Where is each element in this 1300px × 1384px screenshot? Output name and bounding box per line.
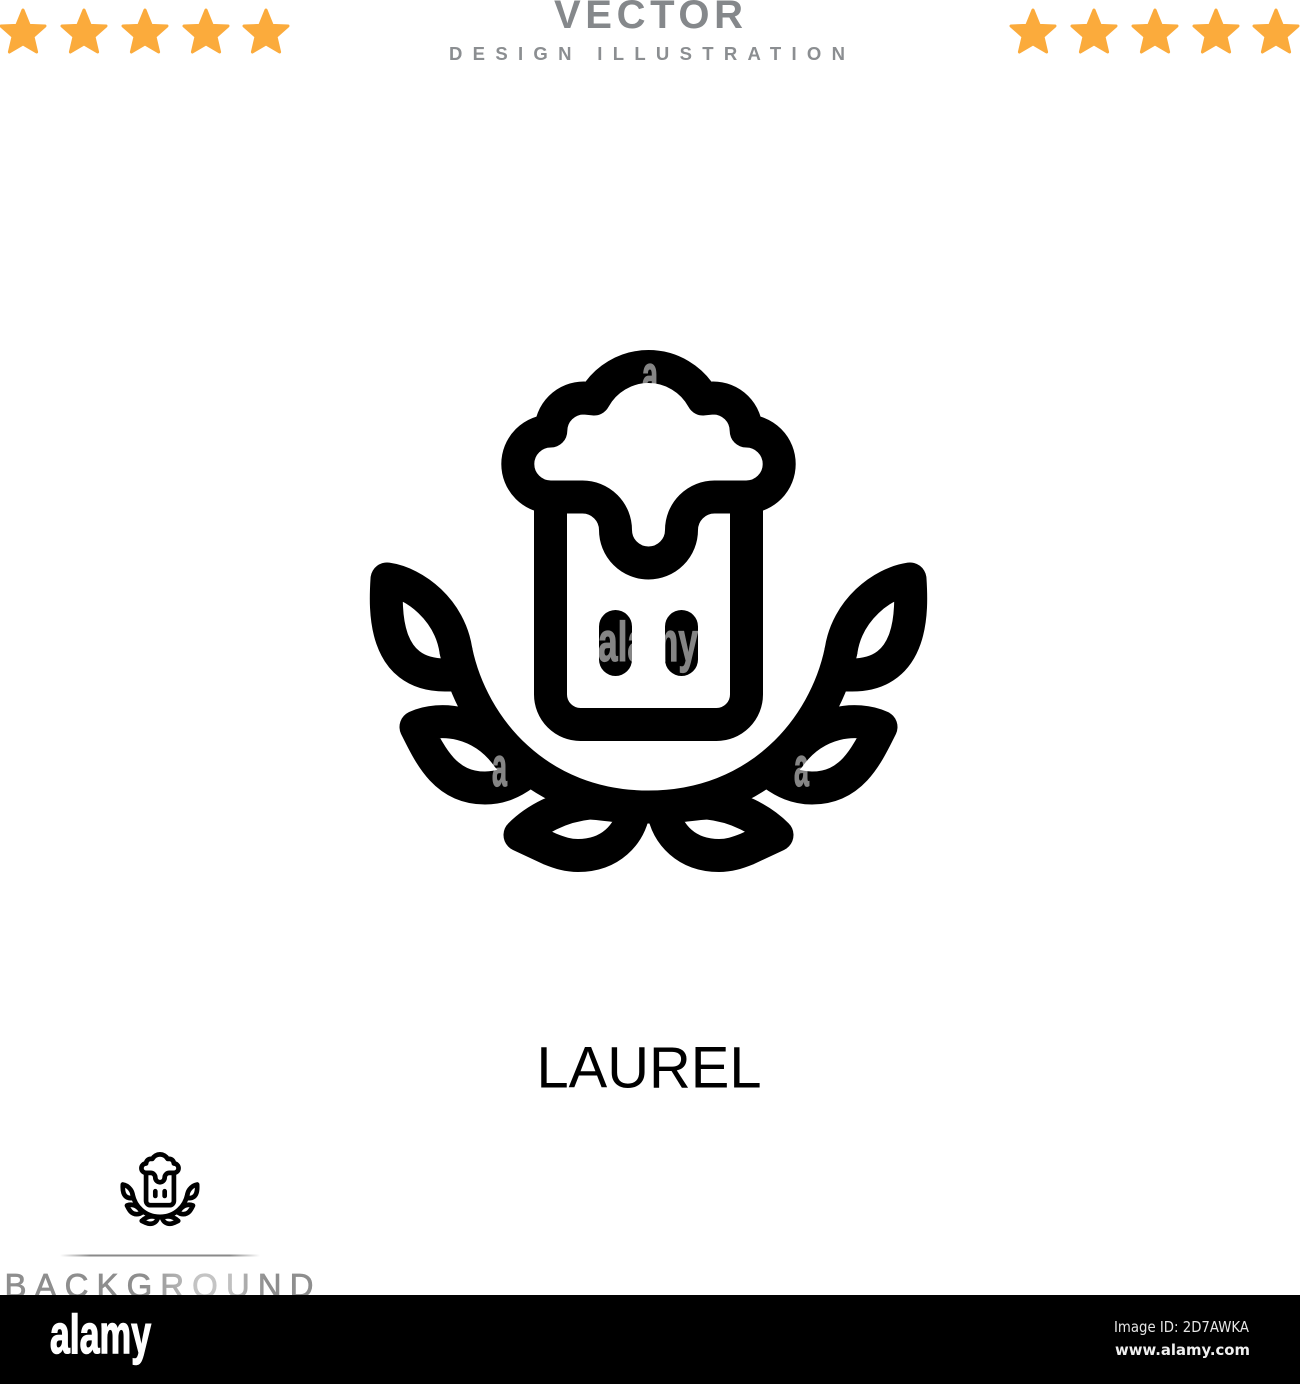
infographic canvas: a [794, 735, 809, 798]
watermark over icon: a [492, 735, 507, 798]
left wreath branch [386, 579, 648, 856]
title: laurel: LAUREL [536, 1036, 762, 1100]
alamy logo: alamy [50, 1303, 151, 1365]
label: background: BACKGROUND [4, 1267, 314, 1304]
website: www.alamy.com [1115, 1341, 1250, 1359]
subheading: design illustration: DESIGN ILLUSTRATION [449, 43, 845, 64]
watermark over icon: a [642, 343, 658, 406]
mug bubbles [616, 626, 682, 660]
small logo icon [123, 1154, 197, 1224]
star rating: right [1011, 10, 1298, 52]
mug foam and drip [518, 367, 779, 563]
mug body [550, 500, 746, 724]
icon: beer mug in laurel wreath [386, 367, 911, 856]
watermark over icon: alamy [598, 610, 698, 673]
right wreath branch [648, 579, 911, 856]
footer bar [0, 1295, 1300, 1384]
image id: Image ID: 2D7AWKA [1114, 1318, 1250, 1336]
star rating: left [1, 10, 288, 52]
watermark over icon [492, 343, 809, 798]
